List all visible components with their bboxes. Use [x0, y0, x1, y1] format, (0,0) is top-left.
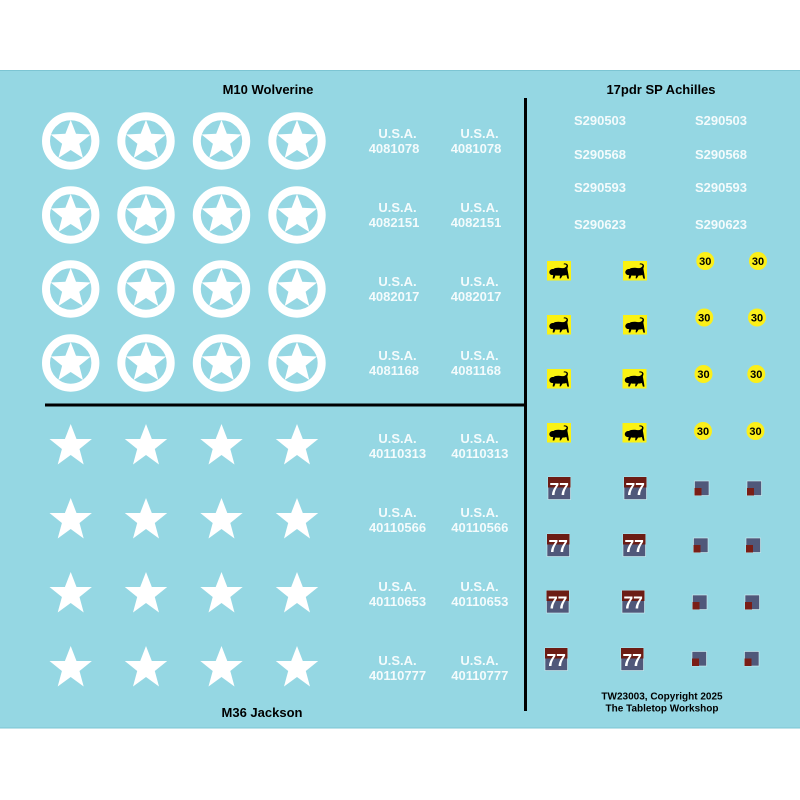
registration numbers: U.S.A.	[378, 579, 417, 594]
registration numbers: 40110777	[369, 668, 426, 683]
registration numbers: U.S.A.	[460, 653, 499, 668]
registration numbers: U.S.A.	[460, 505, 499, 520]
panel: 17pdr SP Achilles	[545, 82, 767, 714]
registration numbers: U.S.A.	[460, 431, 499, 446]
registration numbers: U.S.A.	[460, 579, 499, 594]
registration numbers: 40110313	[451, 446, 508, 461]
yellow 30 circle markers	[694, 252, 767, 440]
serial numbers: S290503	[695, 113, 747, 128]
registration numbers: 4082017	[369, 289, 419, 304]
registration numbers: U.S.A.	[378, 431, 417, 446]
registration numbers: U.S.A.	[378, 126, 417, 141]
registration numbers: U.S.A.	[460, 348, 499, 363]
maroon and blue 77 insignia	[545, 477, 646, 670]
serial numbers: S290623	[695, 217, 747, 232]
copyright text	[601, 692, 723, 714]
registration numbers: 40110777	[451, 668, 508, 683]
registration numbers: U.S.A.	[378, 505, 417, 520]
registration numbers: U.S.A.	[378, 274, 417, 289]
serial numbers: S290568	[574, 147, 626, 162]
registration numbers: U.S.A.	[378, 653, 417, 668]
serial numbers: S290593	[695, 180, 747, 195]
registration numbers: U.S.A.	[378, 200, 417, 215]
copyright text: TW23003, Copyright 2025	[601, 692, 723, 702]
panel: M36 Jackson	[49, 424, 508, 720]
registration numbers: 40110566	[451, 520, 508, 535]
registration numbers: 4081078	[451, 141, 501, 156]
registration numbers: 4081078	[369, 141, 419, 156]
icon: yellow bull insignia	[547, 261, 647, 442]
registration numbers	[369, 126, 501, 378]
registration numbers: U.S.A.	[460, 126, 499, 141]
serial numbers: S290593	[574, 180, 626, 195]
registration numbers: 4081168	[369, 363, 419, 378]
copyright text: The Tabletop Workshop	[606, 704, 718, 714]
heading: 17pdr SP Achilles: 17pdr SP Achilles	[606, 82, 716, 97]
plain white stars grid	[49, 424, 318, 686]
registration numbers: 40110653	[451, 594, 508, 609]
registration numbers: U.S.A.	[378, 348, 417, 363]
serial numbers: S290623	[574, 217, 626, 232]
serial numbers: S290568	[695, 147, 747, 162]
registration numbers: U.S.A.	[460, 200, 499, 215]
registration numbers	[369, 431, 508, 683]
panel: M10 Wolverine	[46, 82, 501, 388]
star roundels grid	[46, 116, 322, 388]
registration numbers: 4081168	[451, 363, 501, 378]
registration numbers: 4082017	[451, 289, 501, 304]
divider lines between sections	[45, 98, 527, 711]
registration numbers: U.S.A.	[460, 274, 499, 289]
heading: M36 Jackson: M36 Jackson	[222, 705, 303, 720]
registration numbers: 40110313	[369, 446, 426, 461]
serial numbers	[574, 113, 747, 232]
registration numbers: 40110566	[369, 520, 426, 535]
registration numbers: 4082151	[451, 215, 501, 230]
registration numbers: 40110653	[369, 594, 426, 609]
heading: M10 Wolverine: M10 Wolverine	[223, 82, 313, 97]
small blue and red squares	[692, 481, 762, 666]
registration numbers: 4082151	[369, 215, 419, 230]
serial numbers: S290503	[574, 113, 626, 128]
